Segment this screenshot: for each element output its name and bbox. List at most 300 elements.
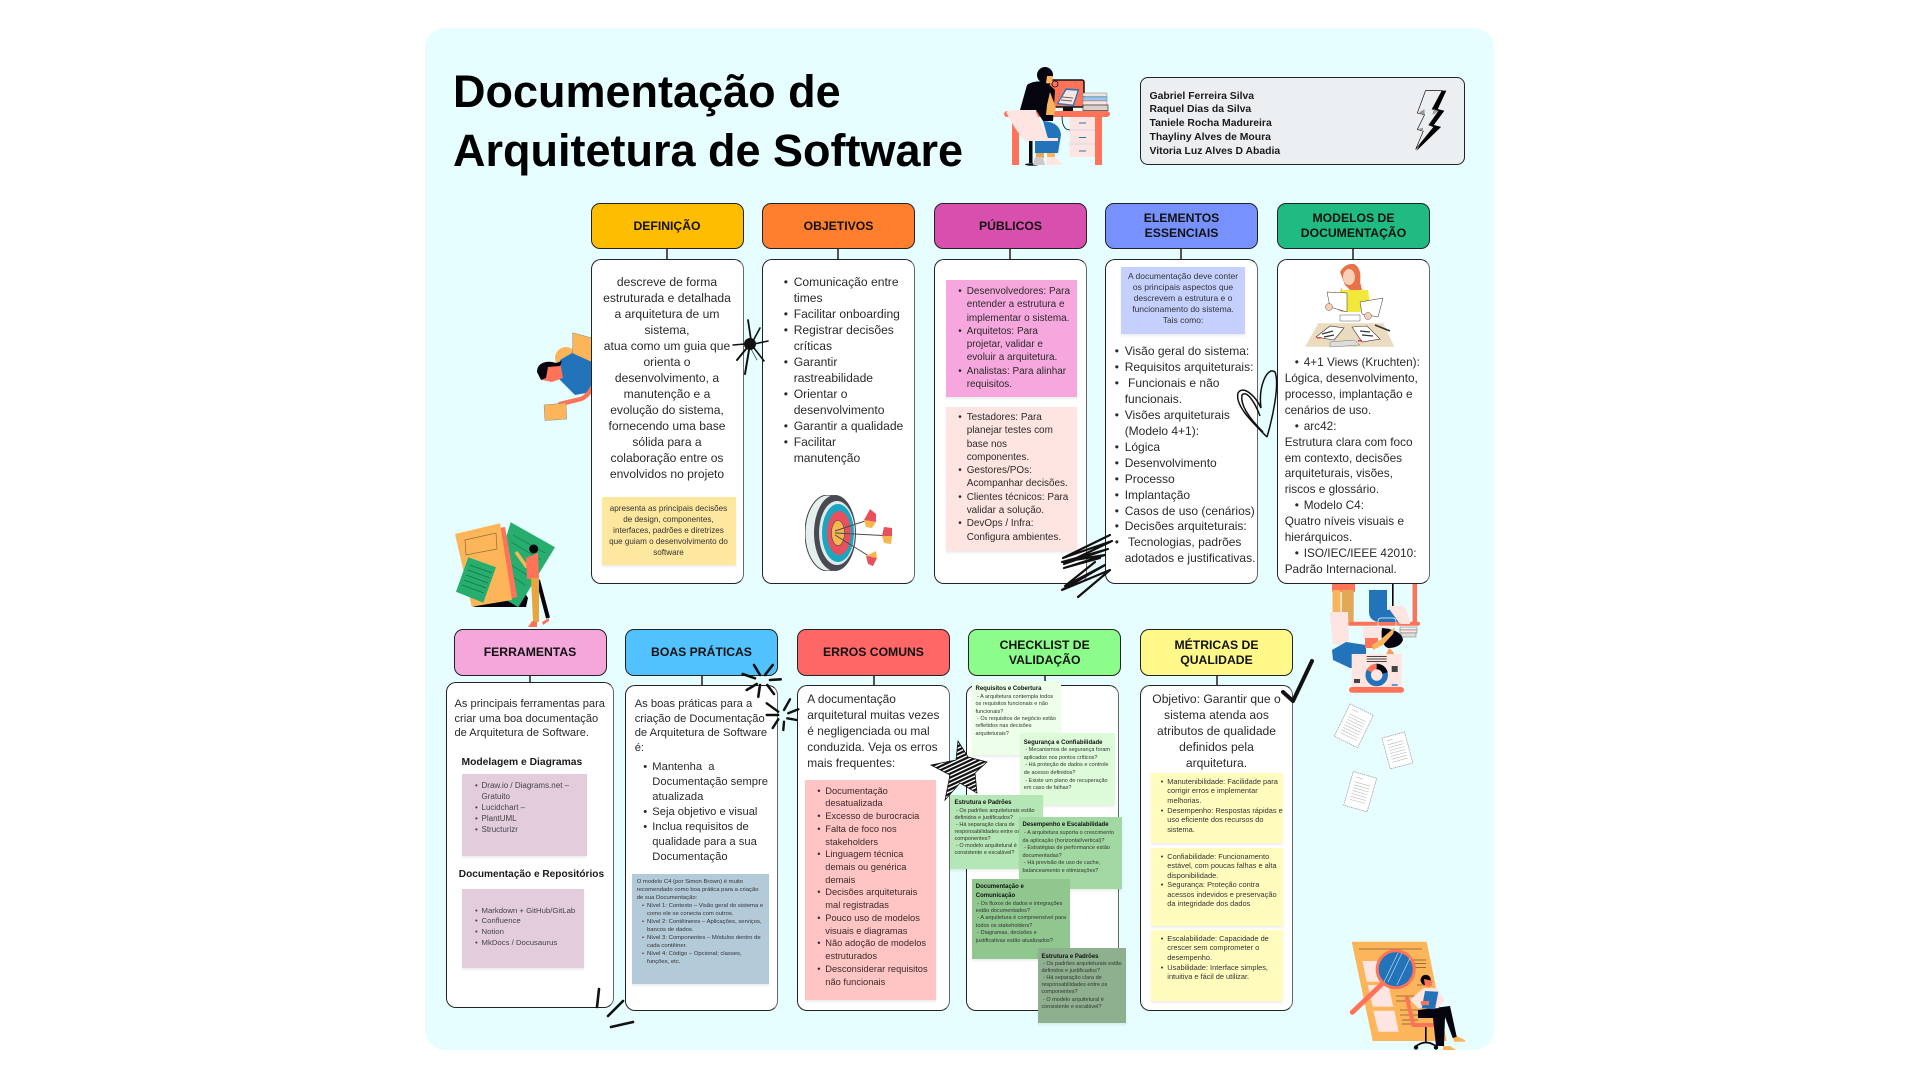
list: metrics two: Confiabilidade: Funcionamento xyxy=(1167,852,1269,860)
list: C4 levels: funções, etc. xyxy=(647,959,680,965)
text: intro: A documentação xyxy=(807,692,896,706)
list: elements: Desenvolvimento xyxy=(1125,456,1217,470)
text: definition: atua como um guia que xyxy=(604,339,730,353)
text: intro: funcionamento do sistema. xyxy=(1132,304,1234,314)
list: other audience: Testadores: Para xyxy=(967,412,1042,423)
text: definition: descreve de forma xyxy=(617,275,717,289)
sticky note: other audience xyxy=(946,407,1077,551)
icon: lightning bolts xyxy=(1415,90,1446,151)
sticky note: requisitos e cobertura: Requisitos e Cobertura xyxy=(976,686,1042,692)
heading: erros comuns xyxy=(797,629,950,676)
icon: magnifier over document with seated person xyxy=(1352,942,1465,1050)
text: intro: A documentação deve conter xyxy=(1128,270,1238,280)
list: technical audience: Analistas: Para alinhar xyxy=(967,366,1066,377)
icon: woman reading documents xyxy=(1305,264,1394,348)
list: modelling tools: PlantUML xyxy=(482,814,517,822)
icon: burst near boas práticas header xyxy=(743,665,781,697)
text: documentation models xyxy=(1285,355,1420,576)
text: intro xyxy=(454,698,605,739)
list: documentation tools: Confluence xyxy=(482,916,521,925)
list: modelling tools: Draw.io / Diagrams.net – xyxy=(482,780,569,790)
text: intro: criar uma boa documentação xyxy=(454,713,598,725)
sticky note: segurança e confiabilidade xyxy=(1020,733,1115,805)
list: common mistakes: não funcionais xyxy=(825,977,885,987)
body card xyxy=(625,685,778,1011)
sticky note: desempenho e escalabilidade xyxy=(1018,817,1122,889)
icon: hatched star xyxy=(931,741,987,800)
body card xyxy=(590,259,744,584)
text: objective: sistema atenda aos xyxy=(1164,708,1269,722)
list: technical audience: implementar o sistema. xyxy=(967,313,1069,324)
text: objective: Objetivo: Garantir que o xyxy=(1152,692,1281,706)
sticky note: metrics two xyxy=(1151,848,1283,926)
icon: scribble xyxy=(1062,535,1112,597)
list: metrics three: Escalabilidade: Capacidade de xyxy=(1167,934,1269,943)
list: other audience: Acompanhar decisões. xyxy=(967,478,1068,489)
icon: ink splat xyxy=(733,320,768,374)
list: good practices xyxy=(644,761,768,863)
list: elements: Tecnologias, padrões xyxy=(1128,535,1241,549)
text: sticky note: interfaces, padrões e diretrizes xyxy=(613,526,724,534)
list: elements xyxy=(1115,344,1255,565)
text: sticky note: apresenta as principais decisões xyxy=(610,504,727,512)
list: goals: Comunicação entre xyxy=(794,274,899,288)
text: definition: orienta o xyxy=(643,355,691,369)
list: metrics two: da integridade dos dados xyxy=(1167,899,1250,908)
text: intro xyxy=(1128,270,1238,325)
sticky note: estrutura e padrões final: responsabilidades entre os xyxy=(1042,982,1107,988)
text: objective xyxy=(1152,692,1281,770)
text: documentation models: arc42: xyxy=(1304,419,1336,433)
list: elements: adotados e justificativas. xyxy=(1125,551,1255,565)
panel: modelos de documentação xyxy=(1277,203,1430,584)
sticky note: common mistakes xyxy=(805,780,936,1000)
sticky note: segurança e confiabilidade: - Mecanismos de segurança foram xyxy=(1025,747,1110,753)
text: intro xyxy=(634,698,767,754)
heading: elementos essenciais: ESSENCIAIS xyxy=(1145,226,1218,240)
list: other audience: validar a solução. xyxy=(967,505,1044,516)
list: goals: times xyxy=(794,290,823,304)
sticky note: documentação e comunicação: - A arquitetura é compreensível para xyxy=(977,915,1066,921)
sticky note: segurança e confiabilidade: aplicados nos pontos críticos? xyxy=(1024,755,1097,761)
list: elements: Processo xyxy=(1125,472,1175,486)
text: C4 intro xyxy=(637,879,758,901)
text: documentation models: Estrutura clara com foco xyxy=(1285,435,1413,449)
sticky note: metrics three xyxy=(1151,930,1283,1001)
list: metrics two xyxy=(1161,852,1277,908)
sticky note: requisitos e cobertura: arquiteturais? xyxy=(976,731,1009,737)
list: goals: Orientar o xyxy=(794,386,847,400)
list: other audience: planejar testes com xyxy=(967,425,1053,436)
sticky note: estrutura e padrões: consistente e escalável? xyxy=(954,850,1014,856)
text: intro: arquitetural muitas vezes xyxy=(807,708,939,722)
list: good practices: atualizada xyxy=(652,791,703,803)
sticky note: documentation tools xyxy=(462,889,584,968)
list: technical audience: Arquitetos: Para xyxy=(967,326,1038,337)
heading: objetivos: OBJETIVOS xyxy=(804,219,873,233)
sticky note: metrics one xyxy=(1151,773,1283,843)
list: metrics one: uso eficiente dos recursos do xyxy=(1167,815,1263,824)
text: intro: de Arquitetura de Software xyxy=(635,727,767,739)
text: author names xyxy=(1150,90,1280,157)
list: common mistakes: Falta de foco nos xyxy=(825,824,897,834)
body card xyxy=(934,259,1087,584)
panel: erros comuns xyxy=(797,629,950,1011)
sticky note: documentação e comunicação: todos os stakeholders? xyxy=(976,923,1032,929)
sticky note: estrutura e padrões: componentes? xyxy=(954,836,991,842)
list: other audience: componentes. xyxy=(967,452,1029,463)
sticky note: desempenho e escalabilidade: documentadas? xyxy=(1022,853,1062,859)
list: metrics one xyxy=(1161,777,1283,834)
sticky note: desempenho e escalabilidade: balanceamento e otimizações? xyxy=(1022,868,1098,874)
list: technical audience: Desenvolvedores: Para xyxy=(967,286,1070,297)
background panel xyxy=(425,28,1494,1050)
sticky note: estrutura e padrões: responsabilidades entre os xyxy=(954,829,1020,835)
list: common mistakes: Linguagem técnica xyxy=(825,849,903,859)
heading: métricas xyxy=(1140,629,1293,676)
list: common mistakes: mal registradas xyxy=(825,900,889,910)
text: definition: fornecendo uma base xyxy=(608,419,726,433)
text: documentation models: Lógica, desenvolvimento, xyxy=(1285,371,1418,385)
text: author names: Taniele Rocha Madureira xyxy=(1150,118,1272,129)
body card xyxy=(1277,259,1430,584)
list: common mistakes: Decisões arquiteturais xyxy=(825,887,917,897)
text: C4 intro: recomendado como boa prática para a criação xyxy=(637,887,758,893)
panel: checklist de validação xyxy=(950,629,1126,1025)
list: metrics three: crescer sem comprometer o xyxy=(1167,943,1259,952)
sticky note: estrutura e padrões: - Há separação clara de xyxy=(956,822,1015,828)
heading: erros comuns: ERROS COMUNS xyxy=(823,645,924,659)
sticky note: documentação e comunicação: - Os fluxos de dados e integrações xyxy=(977,901,1062,907)
text: intro: de Arquitetura de Software. xyxy=(454,727,589,739)
text: sticky note xyxy=(609,504,728,556)
body card xyxy=(446,682,614,1008)
sticky note: requisitos e cobertura: os requisitos funcionais e não xyxy=(976,701,1048,707)
list: common mistakes: stakeholders xyxy=(825,837,878,847)
list: common mistakes: Excesso de burocracia xyxy=(825,811,919,821)
sticky note: estrutura e padrões final: - O modelo arquitetural é xyxy=(1043,997,1104,1003)
list: goals: desenvolvimento xyxy=(794,402,884,416)
text: definition: envolvidos no projeto xyxy=(610,467,724,481)
list: metrics two: disponibilidade. xyxy=(1167,871,1218,880)
list: C4 levels: cada contêiner. xyxy=(647,943,687,949)
panel: definição xyxy=(591,203,744,584)
body card xyxy=(1105,259,1258,584)
sticky note: C4 model xyxy=(632,874,769,984)
text: intro: Tais como: xyxy=(1163,315,1203,325)
sticky note: estrutura e padrões final: - Há separação clara de xyxy=(1043,975,1102,981)
list: goals: Facilitar onboarding xyxy=(794,306,900,320)
text: intro: é: xyxy=(635,742,644,754)
list: goals: rastreabilidade xyxy=(794,370,873,384)
heading: ferramentas xyxy=(454,629,606,676)
body card xyxy=(762,259,915,584)
list: common mistakes: visuais e diagramas xyxy=(825,926,907,936)
list: modelling tools: Structurizr xyxy=(482,824,518,834)
text: intro: os principais aspectos que xyxy=(1133,282,1233,292)
list: metrics one: sistema. xyxy=(1167,825,1195,834)
list: elements: Visão geral do sistema: xyxy=(1125,344,1249,358)
text: intro xyxy=(807,692,939,770)
text: intro: é negligenciada ou mal xyxy=(807,724,930,738)
title xyxy=(453,66,963,176)
text: C4 intro: O modelo C4 (por Simon Brown) é muito xyxy=(637,879,743,885)
heading: boas práticas: BOAS PRÁTICAS xyxy=(651,645,752,659)
list: goals: Garantir a qualidade xyxy=(794,418,903,432)
heading: modelos de documentação: DOCUMENTAÇÃO xyxy=(1301,226,1406,240)
sticky note: technical audience xyxy=(946,280,1077,397)
list: goals: Facilitar xyxy=(794,434,836,448)
heading: checklist: VALIDAÇÃO xyxy=(1009,652,1080,666)
list: other audience xyxy=(958,412,1068,543)
sticky note: requisitos e cobertura: - Os requisitos de negócio estão xyxy=(977,716,1056,722)
icon: burst between boas práticas and erros comuns xyxy=(767,699,798,730)
text: documentation models: arquiteturais, visões, xyxy=(1285,466,1393,480)
sticky note: segurança e confiabilidade: - Existe um plano de recuperação xyxy=(1025,778,1108,784)
heading: elementos essenciais: ELEMENTOS xyxy=(1144,211,1219,225)
sticky note: estrutura e padrões: - O modelo arquitetural é xyxy=(956,843,1017,849)
list: modelling tools: Gratuito xyxy=(482,792,510,800)
list: C4 levels: como ele se conecta com outros. xyxy=(647,911,733,917)
text: intro: criação de Documentação xyxy=(635,712,765,724)
sticky note: documentação e comunicação: - Diagramas, decisões e xyxy=(977,930,1037,936)
sticky note: estrutura e padrões final: Estrutura e Padrões xyxy=(1042,954,1099,960)
list: C4 levels: Nível 1: Contexto – Visão geral do sistema e xyxy=(647,903,763,909)
list: metrics one: Manutenibilidade: Facilidade para xyxy=(1167,777,1278,786)
list: common mistakes: Não adoção de modelos xyxy=(825,938,926,948)
heading: objetivos xyxy=(762,203,915,249)
text: documentation models: Padrão Internacional. xyxy=(1285,562,1397,576)
title: Arquitetura de Software xyxy=(453,125,963,176)
text: definition: desenvolvimento, a xyxy=(615,371,719,385)
list: common mistakes: Pouco uso de modelos xyxy=(825,913,920,923)
sticky note: modelling tools xyxy=(462,774,586,856)
list: metrics three: desempenho. xyxy=(1167,953,1212,962)
sticky note: requisitos e cobertura xyxy=(972,681,1060,755)
sticky note: estrutura e padrões final: - Os padrões arquiteturais estão xyxy=(1043,961,1122,967)
list: metrics one: melhorias. xyxy=(1167,796,1201,805)
list: common mistakes: demais xyxy=(825,875,855,885)
list: other audience: Configura ambientes. xyxy=(967,532,1061,543)
list: C4 levels: bancos de dados. xyxy=(647,927,694,933)
panel: públicos xyxy=(934,203,1087,584)
text: objective: arquitetura. xyxy=(1186,756,1247,770)
text: documentation models: hierárquicos. xyxy=(1285,530,1352,544)
panel: ferramentas xyxy=(446,629,614,1008)
list: technical audience: projetar, validar e xyxy=(967,339,1043,350)
list: other audience: Gestores/POs: xyxy=(967,465,1032,476)
sticky note: segurança e confiabilidade: de acesso definidos? xyxy=(1024,770,1075,776)
text: documentation models: cenários de uso. xyxy=(1285,403,1371,417)
text: author names: Vitoria Luz Alves D Abadia xyxy=(1150,146,1280,157)
list: common mistakes: Desconsiderar requisitos xyxy=(825,964,928,974)
list: C4 levels xyxy=(642,903,763,965)
heading: checklist xyxy=(968,629,1121,676)
sticky note: desempenho e escalabilidade: da aplicação (horizontal/vertical)? xyxy=(1022,838,1104,844)
text: definition: colaboração entre os xyxy=(611,451,723,465)
list: metrics three: intuitiva e fácil de utilizar. xyxy=(1167,972,1249,981)
heading: métricas: QUALIDADE xyxy=(1180,652,1253,666)
list: goals: críticas xyxy=(794,338,832,352)
list: C4 levels: Nível 3: Componentes – Módulos dentro de xyxy=(647,935,761,941)
text: definition: a arquitetura de um xyxy=(615,307,719,321)
panel: authors xyxy=(1140,77,1465,165)
list: metrics two: estável, com poucas falhas e alta xyxy=(1167,861,1277,870)
text: author names: Gabriel Ferreira Silva xyxy=(1150,90,1254,102)
body card xyxy=(1140,685,1293,1011)
text: sticky note: que guiam o desenvolvimento do xyxy=(609,536,728,546)
list: metrics two: acessos indevidos e preservação xyxy=(1167,890,1277,899)
list: technical audience: evoluir a arquitetura. xyxy=(967,352,1057,363)
heading: públicos: PÚBLICOS xyxy=(979,219,1042,233)
sticky note: estrutura e padrões final: definidos e justificados? xyxy=(1042,968,1100,974)
list: modelling tools xyxy=(475,780,570,834)
list: goals xyxy=(784,274,903,464)
list: technical audience: entender a estrutura e xyxy=(967,299,1064,310)
list: goals: Registrar decisões xyxy=(794,322,894,336)
text: definition: evolução do sistema, xyxy=(610,403,724,417)
heading: elementos essenciais xyxy=(1105,203,1258,249)
sticky note: documentação e comunicação: Comunicação xyxy=(976,893,1015,899)
list: goals: manutenção xyxy=(794,450,860,464)
icon: scattered document sheets xyxy=(1334,704,1413,812)
list: good practices: Mantenha a xyxy=(652,761,714,773)
sticky note: estrutura e padrões: definidos e justificados? xyxy=(954,815,1013,821)
list: good practices: Inclua requisitos de xyxy=(652,821,749,833)
list: common mistakes: desatualizada xyxy=(825,798,883,808)
text: intro: As principais ferramentas para xyxy=(454,698,605,710)
icon: person with giant folders xyxy=(455,522,555,627)
list: metrics one: Desempenho: Respostas rápidas e xyxy=(1167,806,1283,815)
subheading: documentação: Documentação e Repositórios xyxy=(459,869,604,880)
text: author names: Thayliny Alves de Moura xyxy=(1150,132,1271,143)
list: metrics one: corrigir erros e implementar xyxy=(1167,786,1258,795)
sticky note: desempenho e escalabilidade: - A arquitetura suporta o crescimento xyxy=(1024,830,1114,836)
list: good practices: qualidade para a sua xyxy=(652,836,757,848)
sticky note: estrutura e padrões: Estrutura e Padrões xyxy=(954,800,1012,806)
text: sticky note: de design, componentes, xyxy=(623,514,714,524)
text: objective: definidos pela xyxy=(1179,740,1254,754)
list: other audience: DevOps / Infra: xyxy=(967,518,1034,529)
list: metrics three: Usabilidade: Interface simples, xyxy=(1167,963,1268,972)
text: documentation models: em contexto, decisões xyxy=(1285,451,1402,465)
sticky note: estrutura e padrões: - Os padrões arquiteturais estão xyxy=(956,808,1035,814)
text: intro: mais frequentes: xyxy=(807,756,895,770)
panel: boas práticas xyxy=(625,629,778,1011)
text: documentation models: ISO/IEC/IEEE 42010: xyxy=(1304,546,1416,560)
heading: métricas: MÉTRICAS DE xyxy=(1175,638,1258,652)
icon: check mark xyxy=(1283,661,1312,701)
heading: ferramentas: FERRAMENTAS xyxy=(484,645,576,659)
icon: person working at desk xyxy=(1004,67,1110,166)
body card xyxy=(966,685,1118,1011)
list: elements: Requisitos arquiteturais: xyxy=(1125,360,1253,374)
heading: modelos de documentação: MODELOS DE xyxy=(1313,211,1394,225)
sticky note: intro xyxy=(1121,267,1245,334)
list: common mistakes xyxy=(818,786,928,987)
heading: definição: DEFINIÇÃO xyxy=(633,219,701,233)
text: documentation models: riscos e glossário. xyxy=(1285,482,1379,496)
text: documentation models: Modelo C4: xyxy=(1304,498,1364,512)
text: definition: sistema, xyxy=(644,323,690,337)
text: definition: estruturada e detalhada xyxy=(603,291,731,305)
heading: públicos xyxy=(934,203,1087,249)
text: C4 intro: de sua Documentação: xyxy=(637,895,697,901)
sticky note: estrutura e padrões final: consistente e escalável? xyxy=(1042,1004,1101,1010)
sticky note: estrutura e padrões xyxy=(950,795,1043,869)
sticky note: requisitos e cobertura: - A arquitetura contempla todos xyxy=(977,694,1053,700)
panel: métricas de qualidade xyxy=(1140,629,1293,1011)
sticky note xyxy=(602,497,736,565)
list: elements: Decisões arquiteturais: xyxy=(1125,519,1247,533)
heading: boas práticas xyxy=(625,629,778,676)
list: metrics two: Segurança: Proteção contra xyxy=(1167,880,1259,889)
list: metrics three xyxy=(1161,934,1269,981)
body card xyxy=(797,685,950,1011)
list: technical audience xyxy=(958,286,1070,390)
sticky note: documentação e comunicação: justificativas estão atualizados? xyxy=(976,938,1053,944)
icon: burst below ferramentas xyxy=(597,989,633,1027)
sticky note: requisitos e cobertura: refletidos nas decisões xyxy=(976,723,1031,729)
text: documentation models: processo, implantação e xyxy=(1285,387,1413,401)
list: elements: Implantação xyxy=(1125,488,1190,502)
list: technical audience: requisitos. xyxy=(967,379,1012,390)
list: documentation tools xyxy=(475,906,575,947)
sticky note: desempenho e escalabilidade: Desempenho e Escalabilidade xyxy=(1022,822,1109,828)
list: documentation tools: Notion xyxy=(482,927,504,936)
panel: elementos essenciais xyxy=(1105,203,1258,584)
list: elements: Casos de uso (cenários) xyxy=(1125,504,1255,518)
list: other audience: Clientes técnicos: Para xyxy=(967,492,1068,503)
list: elements: (Modelo 4+1): xyxy=(1125,424,1199,438)
heading: modelos de documentação xyxy=(1277,203,1430,249)
list: elements: Lógica xyxy=(1125,440,1160,454)
list: good practices: Documentação xyxy=(652,851,728,863)
list: documentation tools: Markdown + GitHub/GitLab xyxy=(482,906,575,914)
text: objective: atributos de qualidade xyxy=(1157,724,1276,738)
list: common mistakes: Documentação xyxy=(825,786,888,796)
text: definition: manutenção e a xyxy=(624,387,710,401)
sticky note: desempenho e escalabilidade: - Estratégias de performance estão xyxy=(1024,845,1110,851)
sticky note: documentação e comunicação: estão documentados? xyxy=(976,908,1030,914)
list: modelling tools: Lucidchart – xyxy=(482,802,525,812)
text: intro: As boas práticas para a xyxy=(635,698,752,710)
text: intro: descrevem a estrutura e o xyxy=(1134,293,1232,303)
list: C4 levels: Nível 2: Contêineres – Aplicações, serviços, xyxy=(647,919,762,925)
list: elements: Funcionais e não xyxy=(1128,376,1219,390)
sticky note: documentação e comunicação xyxy=(972,879,1070,959)
text: documentation models: 4+1 Views (Kruchten): xyxy=(1304,355,1420,369)
icon: target with darts xyxy=(805,495,892,571)
title: Documentação de xyxy=(453,66,841,117)
text: documentation models: Quatro níveis visuais e xyxy=(1285,514,1404,528)
heading: checklist: CHECKLIST DE xyxy=(1000,638,1090,652)
list: other audience: base nos xyxy=(967,439,1007,450)
text: definition xyxy=(603,275,731,481)
icon: hand-drawn heart xyxy=(1238,371,1277,437)
sticky note: segurança e confiabilidade: - Há proteção de dados e controle xyxy=(1025,762,1108,768)
text: sticky note: software xyxy=(653,548,684,556)
list: common mistakes: demais ou genérica xyxy=(825,862,906,872)
panel: objetivos xyxy=(762,203,915,584)
list: good practices: Documentação sempre xyxy=(652,776,768,788)
icon: woman peeking with documents xyxy=(537,333,592,420)
sticky note: estrutura e padrões final xyxy=(1038,948,1126,1023)
sticky note: segurança e confiabilidade: Segurança e Confiabilidade xyxy=(1024,740,1102,746)
list: elements: funcionais. xyxy=(1125,392,1182,406)
sticky note: segurança e confiabilidade: em caso de falhas? xyxy=(1024,785,1072,791)
list: C4 levels: Nível 4: Código – Opcional; classes, xyxy=(647,951,742,957)
